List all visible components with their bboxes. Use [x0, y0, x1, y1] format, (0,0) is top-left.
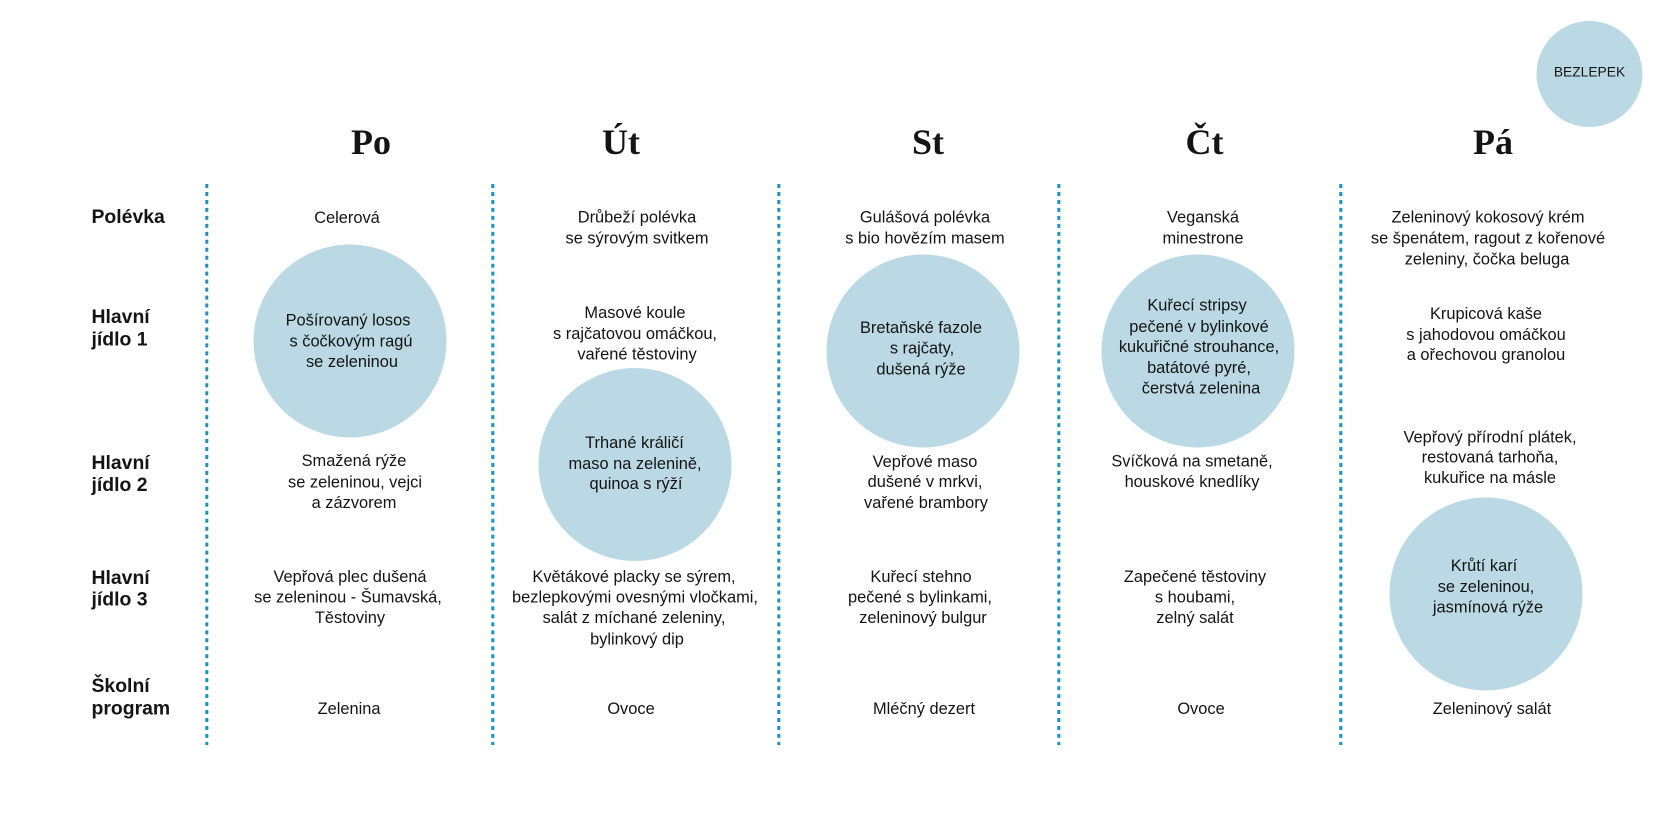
Čt main 1 gluten-free circle: Kuřecí stripsy	[1147, 296, 1247, 314]
St school: Mléčný dezert	[873, 700, 975, 718]
Pá main 2	[1403, 428, 1577, 487]
Čt main 1 gluten-free circle	[1102, 254, 1294, 448]
row label: Hlavní jídlo 3: Hlavní	[92, 567, 150, 589]
Pá main 3 gluten-free circle: jasmínová rýže	[1432, 598, 1543, 616]
Út main 1	[553, 304, 717, 364]
Čt soup: minestrone	[1162, 230, 1244, 248]
row label: Polévka: Polévka	[92, 206, 165, 228]
Út main 3: bylinkový dip	[590, 630, 684, 648]
Út main 1: vařené těstoviny	[577, 346, 697, 364]
Po main 2: a zázvorem	[312, 494, 396, 512]
Pá main 3 gluten-free circle: Krůtí karí	[1451, 557, 1518, 575]
Po main 3	[254, 568, 442, 627]
legend: bezlepek badge	[1536, 21, 1642, 127]
Čt main 3	[1124, 568, 1267, 627]
row label: Školní program	[92, 673, 170, 720]
row label: Školní program: Školní	[92, 673, 150, 697]
row label: Hlavní jídlo 2: Hlavní	[92, 452, 150, 474]
column: Po	[254, 209, 446, 718]
heading: Pá: Pá	[1473, 122, 1513, 162]
St main 3: zeleninový bulgur	[859, 609, 987, 627]
column: St	[826, 208, 1020, 718]
Čt main 3: s houbami,	[1155, 588, 1235, 606]
row label: Hlavní jídlo 3	[90, 567, 150, 610]
St soup	[845, 208, 1005, 248]
Čt main 3: Zapečené těstoviny	[1124, 568, 1267, 586]
Pá main 1: Krupicová kaše	[1430, 305, 1542, 323]
Pá soup: zeleniny, čočka beluga	[1405, 250, 1570, 268]
Út soup: se sýrovým svitkem	[566, 230, 708, 248]
column: Út	[512, 208, 758, 718]
Út main 3: bezlepkovými ovesnými vločkami,	[512, 588, 758, 606]
Út main 2 gluten-free circle	[538, 368, 732, 561]
Pá main 1: s jahodovou omáčkou	[1406, 326, 1566, 344]
heading: Út: Út	[602, 122, 640, 162]
Pá main 1	[1406, 305, 1566, 364]
column: Pá	[1371, 208, 1605, 718]
St main 1 gluten-free circle	[826, 254, 1020, 448]
Čt main 1 gluten-free circle: čerstvá zelenina	[1142, 380, 1261, 398]
Pá main 2: restovaná tarhoňa,	[1422, 448, 1558, 466]
Pá soup	[1371, 208, 1605, 268]
St main 1 gluten-free circle: dušená rýže	[876, 360, 966, 378]
Po main 2: Smažená rýže	[302, 452, 406, 470]
Po main 1 gluten-free circle: Pošírovaný losos	[286, 312, 410, 330]
row label: Hlavní jídlo 2	[90, 452, 150, 496]
Út main 2 gluten-free circle: maso na zelenině,	[568, 455, 702, 473]
row label: Hlavní jídlo 3: jídlo 3	[90, 588, 148, 610]
Út main 1: s rajčatovou omáčkou,	[553, 325, 717, 343]
Út main 3: Květákové placky se sýrem,	[532, 568, 736, 586]
Pá main 2: kukuřice na másle	[1424, 469, 1556, 487]
Pá main 3 gluten-free circle	[1390, 498, 1582, 690]
St main 1 gluten-free circle: Bretaňské fazole	[860, 319, 982, 337]
heading: Čt: Čt	[1186, 122, 1224, 162]
row label: Hlavní jídlo 1	[90, 306, 150, 350]
St main 3: Kuřecí stehno	[870, 568, 972, 586]
St main 2: vařené brambory	[864, 494, 989, 512]
Út soup	[566, 208, 708, 248]
St main 2: dušené v mrkvi,	[868, 473, 982, 491]
heading: Po: Po	[351, 122, 391, 162]
St main 3: pečené s bylinkami,	[848, 588, 992, 606]
Čt main 2: houskové knedlíky	[1125, 473, 1260, 491]
Út main 2 gluten-free circle: quinoa s rýží	[590, 475, 683, 493]
St main 2	[864, 453, 989, 512]
St main 1 gluten-free circle: s rajčaty,	[890, 340, 954, 358]
row label: Školní program: program	[92, 698, 170, 720]
Po main 1 gluten-free circle: se zeleninou	[306, 353, 398, 371]
Út soup: Drůbeží polévka	[578, 208, 697, 226]
heading: St: St	[912, 122, 944, 162]
Po main 3: se zeleninou - Šumavská,	[254, 588, 442, 606]
legend: bezlepek badge: BEZLEPEK	[1554, 64, 1626, 80]
St soup: Gulášová polévka	[860, 208, 991, 226]
Čt main 3: zelný salát	[1156, 609, 1234, 627]
Út main 3: salát z míchané zeleniny,	[543, 609, 725, 627]
column: Čt	[1102, 208, 1294, 718]
Pá main 2: Vepřový přírodní plátek,	[1403, 428, 1577, 446]
row label: Hlavní jídlo 2: jídlo 2	[90, 474, 148, 496]
Čt main 1 gluten-free circle: kukuřičné strouhance,	[1119, 338, 1279, 356]
Po main 3: Těstoviny	[315, 609, 386, 627]
Pá school: Zeleninový salát	[1433, 700, 1552, 718]
row label: Hlavní jídlo 1: Hlavní	[92, 306, 150, 328]
Po main 1 gluten-free circle	[254, 244, 446, 438]
Po soup: Celerová	[314, 209, 381, 227]
Čt main 2	[1111, 452, 1273, 491]
Po main 3: Vepřová plec dušená	[273, 568, 427, 586]
Čt main 2: Svíčková na smetaně,	[1111, 452, 1273, 470]
Čt main 1 gluten-free circle: batátové pyré,	[1147, 359, 1251, 377]
St main 3	[848, 568, 992, 627]
Po school: Zelenina	[318, 700, 381, 718]
Čt soup: Veganská	[1167, 208, 1240, 226]
Út main 1: Masové koule	[584, 304, 686, 322]
Pá main 1: a ořechovou granolou	[1407, 346, 1565, 364]
Út main 3	[512, 568, 758, 648]
Po main 2	[288, 452, 422, 512]
Po main 2: se zeleninou, vejci	[288, 474, 422, 492]
Pá soup: se špenátem, ragout z kořenové	[1371, 230, 1605, 248]
St soup: s bio hovězím masem	[845, 230, 1005, 248]
row label: Hlavní jídlo 1: jídlo 1	[90, 328, 148, 350]
Po main 1 gluten-free circle: s čočkovým ragú	[290, 332, 412, 350]
Čt main 1 gluten-free circle: pečené v bylinkové	[1129, 318, 1269, 336]
Čt soup	[1162, 208, 1244, 248]
St main 2: Vepřové maso	[873, 453, 977, 471]
Út main 2 gluten-free circle: Trhané králičí	[585, 434, 684, 452]
Čt school: Ovoce	[1177, 700, 1225, 718]
Pá main 3 gluten-free circle: se zeleninou,	[1438, 578, 1534, 596]
Út school: Ovoce	[607, 700, 655, 718]
Pá soup: Zeleninový kokosový krém	[1391, 208, 1585, 226]
